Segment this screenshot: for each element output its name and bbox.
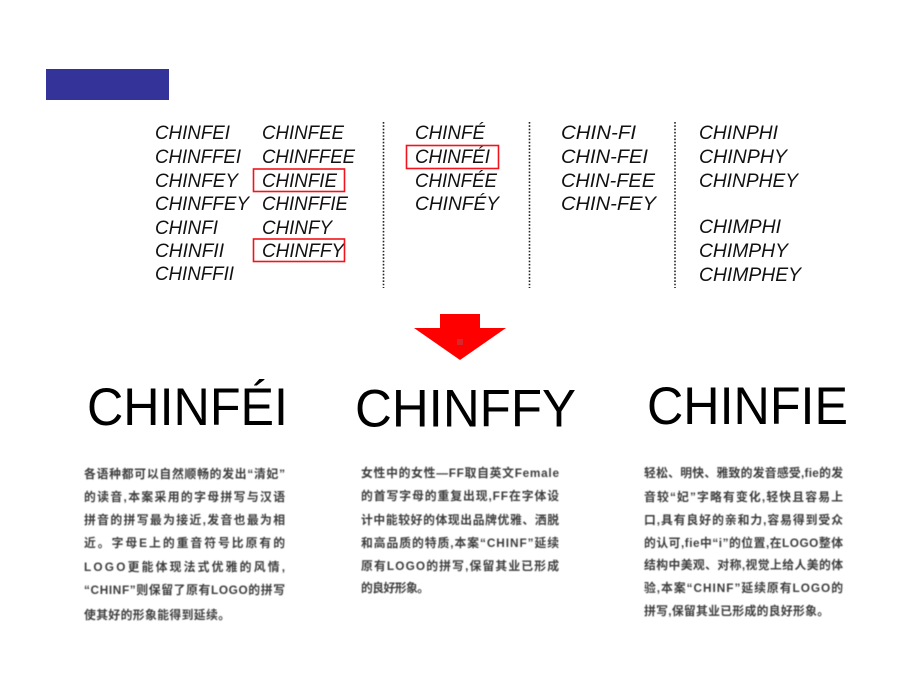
dotted divider 3 — [674, 122, 676, 288]
heading: CHINFÉI: CHINFÉI — [87, 378, 288, 437]
text block: CHINFFY rationale: 的首写字母的重复出现,FF在字体设 — [361, 489, 559, 503]
text block: CHINFIE rationale: 的认可,fie中“i”的位置,在LOGO整体 — [644, 536, 843, 550]
name list: column 5: CHINPHEY — [699, 171, 799, 192]
name list: column 4 — [561, 123, 657, 215]
name list: column 4: CHIN-FEI — [561, 147, 649, 168]
name list: column 2 — [262, 123, 355, 262]
name list: column 5: CHINPHI — [699, 123, 779, 144]
text block: CHINFIE rationale: 拼写,保留其业已形成的良好形象。 — [644, 604, 829, 618]
name list: column 1: CHINFEY — [155, 171, 239, 192]
name list: column 2: CHINFFIE — [262, 194, 348, 215]
highlight box: CHINFIE — [254, 169, 344, 192]
text block: CHINFÉI rationale — [84, 467, 285, 622]
name list: column 3 — [415, 123, 500, 215]
text block: CHINFIE rationale — [644, 466, 843, 618]
text block: CHINFÉI rationale: 的读音,本案采用的字母拼写与汉语 — [84, 490, 285, 504]
name list: column 2: CHINFFEE — [262, 147, 355, 168]
arrow: red down arrow — [414, 314, 506, 360]
name list: column 1: CHINFFEI — [155, 147, 242, 168]
name list: column 5 — [699, 123, 802, 286]
text block: CHINFÉI rationale: “CHINF”则保留了原有LOGO的拼写 — [84, 583, 285, 597]
highlight box: CHINFFY — [254, 239, 344, 262]
blue title block — [46, 69, 169, 100]
dotted divider 1 — [382, 122, 384, 288]
text block: CHINFFY rationale: 和高品质的特质,本案“CHINF”延续 — [361, 536, 559, 550]
text block: CHINFÉI rationale: 近。字母E上的重音符号比原有的 — [84, 536, 285, 550]
text block: CHINFFY rationale: 原有LOGO的拼写,保留其业已形成 — [361, 559, 559, 573]
text block: CHINFIE rationale: 验,本案“CHINF”延续原有LOGO的 — [644, 581, 843, 595]
text block: CHINFÉI rationale: 各语种都可以自然顺畅的发出“清妃” — [84, 467, 285, 481]
text block: CHINFFY rationale — [361, 466, 559, 595]
name list: column 2: CHINFEE — [262, 123, 344, 144]
text block: CHINFÉI rationale: 使其好的形象能得到延续。 — [84, 608, 230, 622]
name list: column 1: CHINFFII — [155, 264, 235, 285]
name list: column 3: CHINFÉY — [415, 194, 500, 215]
text block: CHINFIE rationale: 口,具有良好的亲和力,容易得到受众 — [644, 513, 843, 527]
name list: column 4: CHIN-FEE — [561, 171, 655, 192]
name list: column 1: CHINFI — [155, 218, 219, 239]
name list: column 5: CHIMPHI — [699, 217, 782, 238]
name list: column 1: CHINFFEY — [155, 194, 250, 215]
name list: column 5: CHIMPHY — [699, 241, 789, 262]
name list: column 4: CHIN-FI — [561, 123, 637, 144]
name list: column 4: CHIN-FEY — [561, 194, 657, 215]
text block: CHINFÉI rationale: LOGO更能体现法式优雅的风情, — [84, 560, 285, 574]
heading: CHINFFY: CHINFFY — [355, 380, 576, 438]
name list: column 5: CHINPHY — [699, 147, 788, 168]
text block: CHINFIE rationale: 音较“妃”字略有变化,轻快且容易上 — [644, 490, 843, 504]
name list: column 2: CHINFY — [262, 218, 333, 239]
name list: column 3: CHINFÉ — [415, 123, 485, 144]
name list: column 3: CHINFÉE — [415, 171, 497, 192]
heading: CHINFIE: CHINFIE — [647, 377, 848, 436]
name list: column 1: CHINFEI — [155, 123, 231, 144]
text block: CHINFFY rationale: 计中能较好的体现出品牌优雅、洒脱 — [361, 513, 559, 527]
name list: column 2: CHINFFY — [262, 241, 345, 262]
text block: CHINFFY rationale: 的良好形象。 — [361, 581, 429, 595]
name list: column 3: CHINFÉI — [415, 147, 491, 168]
text block: CHINFÉI rationale: 拼音的拼写最为接近,发音也最为相 — [84, 513, 285, 527]
text block: CHINFIE rationale: 轻松、明快、雅致的发音感受,fie的发 — [644, 466, 843, 480]
name list: column 5: CHIMPHEY — [699, 265, 802, 286]
name list: column 1: CHINFII — [155, 241, 225, 262]
dotted divider 2 — [528, 122, 530, 288]
name list: column 1 — [155, 123, 250, 285]
text block: CHINFIE rationale: 结构中美观、对称,视觉上给人美的体 — [644, 558, 843, 572]
text block: CHINFFY rationale: 女性中的女性—FF取自英文Female — [361, 466, 559, 480]
highlight box: CHINFÉI — [406, 146, 498, 168]
name list: column 2: CHINFIE — [262, 171, 337, 192]
